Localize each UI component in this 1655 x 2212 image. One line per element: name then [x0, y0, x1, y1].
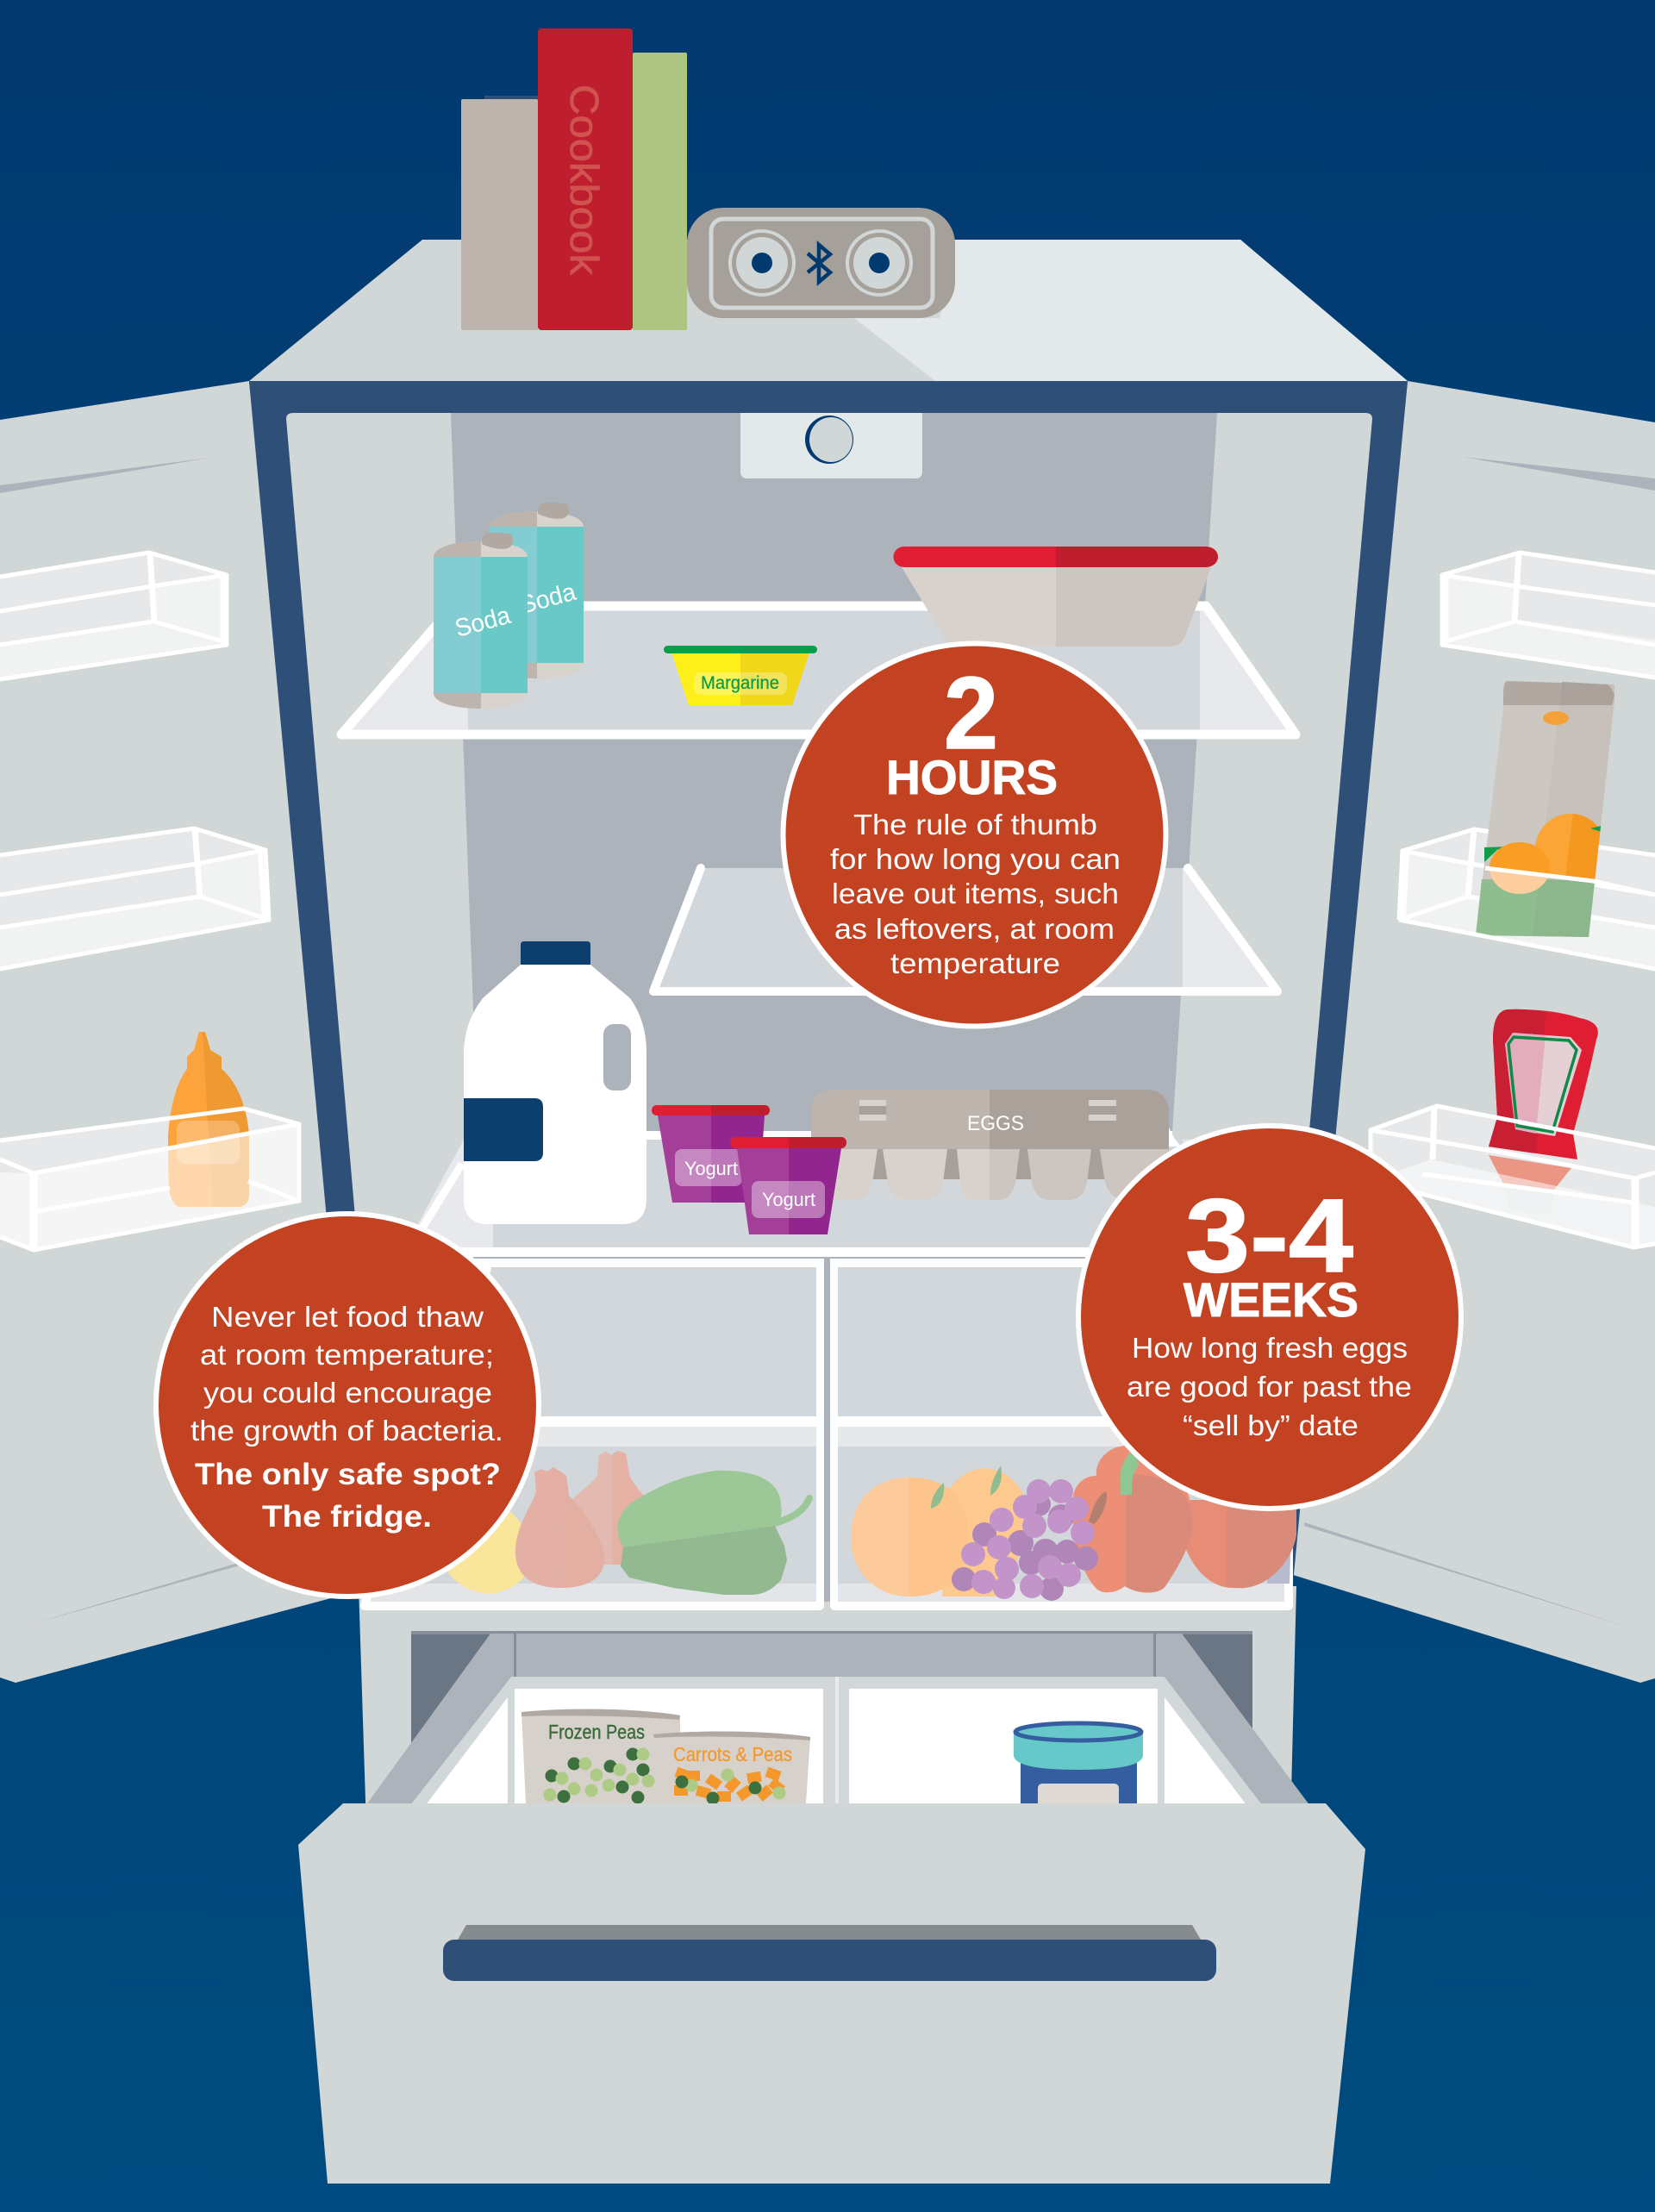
- front yogurt cup: [730, 1137, 846, 1234]
- freezer drawer front: [298, 1803, 1365, 2184]
- callout: never thaw at room temperature: at room temperature;: [200, 1339, 494, 1371]
- icon: ice cream tub: [1014, 1723, 1143, 1806]
- back yogurt cup: Yogurt: [684, 1158, 738, 1179]
- egg carton cups: [828, 1149, 1171, 1200]
- callout: 3-4 weeks: “sell by” date: [1183, 1409, 1358, 1441]
- icon: lemon: [436, 1510, 544, 1593]
- icon: yogurt cups: [652, 1105, 846, 1234]
- callout: never thaw at room temperature: The fridge.: [262, 1500, 432, 1534]
- icon: onion back: [569, 1451, 657, 1565]
- middle shelf: [653, 868, 1277, 991]
- callout: 3-4 weeks: How long fresh eggs: [1132, 1332, 1408, 1364]
- door shelf: left top: [0, 553, 227, 679]
- crisper drawers: [360, 1247, 1296, 1610]
- icon: bluetooth speaker: [687, 208, 955, 318]
- freezer bins: [409, 1677, 1263, 1806]
- icon: mustard bottle: [168, 1032, 249, 1207]
- back soda can: Soda: [517, 578, 579, 620]
- callout: 2 hours: temperature: [890, 947, 1060, 979]
- icon: soda cans: [434, 503, 584, 709]
- interior light: [740, 413, 922, 478]
- callout: 2 hours: The rule of thumb: [853, 809, 1097, 840]
- door shelf: right bottom back: [1371, 1106, 1655, 1247]
- icon: books: [461, 28, 687, 330]
- door shelf: left middle: [0, 828, 269, 969]
- left fridge door: [0, 381, 366, 1683]
- bottom shelf: [405, 1122, 1246, 1250]
- icon: milk jug: [464, 941, 646, 1224]
- icon: egg carton: EGGS: [967, 1112, 1024, 1135]
- icon: oranges: [851, 1465, 1027, 1597]
- icon: juice carton: [1476, 681, 1614, 937]
- callout: 3-4 weeks: are good for past the: [1127, 1371, 1412, 1403]
- door shelf: right middle back: [1399, 829, 1655, 969]
- front soda can: [434, 533, 528, 709]
- back wall: [451, 413, 1217, 1147]
- front soda can: Soda: [453, 602, 514, 643]
- callout: 2 hours: leave out items, such: [832, 878, 1119, 909]
- icon: carrots and peas bag: Carrots & Peas: [673, 1743, 792, 1765]
- drawer handle: [443, 1925, 1216, 1981]
- left crisper drawer: [360, 1259, 824, 1610]
- callout: never thaw at room temperature: The only safe spot?: [195, 1458, 501, 1491]
- egg carton lid: [811, 1090, 990, 1149]
- fridge lower body: [359, 1586, 1296, 1828]
- icon: red peppers: [1072, 1446, 1296, 1593]
- callout: 2 hours: 2: [944, 656, 998, 771]
- door shelf: right middle glass front: [1399, 881, 1655, 969]
- door shelf: left bottom with mustard: [0, 1032, 299, 1250]
- back soda can: [490, 503, 584, 678]
- icon: margarine tub: Margarine: [701, 673, 779, 693]
- icon: egg carton: [811, 1090, 1171, 1200]
- back yogurt cup: [652, 1105, 770, 1203]
- fridge top surface: [249, 240, 1408, 381]
- icon: green pepper: [617, 1471, 809, 1595]
- right fridge door: [1290, 381, 1655, 1683]
- icon: grapes: [952, 1479, 1098, 1601]
- icon: ketchup bottle: [1489, 1009, 1598, 1215]
- callout: never thaw at room temperature: you could encourage: [203, 1377, 492, 1409]
- door shelf: right bottom glass: [1371, 1106, 1655, 1247]
- book title: Cookbook: [562, 84, 607, 276]
- callout: 2 hours: HOURS: [886, 750, 1058, 804]
- callout: 3-4 weeks: WEEKS: [1183, 1272, 1358, 1327]
- callout: 3-4 weeks: [1078, 1126, 1461, 1509]
- callout: never thaw at room temperature: the growth of bacteria.: [190, 1415, 503, 1447]
- top shelf: [341, 606, 1296, 734]
- icon: onion front: [515, 1467, 604, 1588]
- callout: 2 hours: for how long you can: [830, 843, 1121, 875]
- icon: carrots and peas bag: [653, 1732, 810, 1805]
- fridge navy frame: [249, 381, 1408, 1610]
- callout: 3-4 weeks: 3-4: [1185, 1177, 1353, 1294]
- fridge interior: [286, 413, 1372, 1267]
- freezer opening: [365, 1631, 1310, 1806]
- callout: never thaw at room temperature: Never let food thaw: [211, 1301, 484, 1333]
- callout: never thaw at room temperature: [156, 1214, 539, 1597]
- callout: 2 hours: [783, 643, 1165, 1026]
- icon: frozen peas bag: [521, 1709, 680, 1803]
- icon: frozen peas bag: Frozen Peas: [548, 1721, 645, 1743]
- door shelf: right top: [1442, 553, 1655, 678]
- callout: 2 hours: as leftovers, at room: [834, 913, 1115, 945]
- right crisper drawer: [830, 1259, 1293, 1610]
- front yogurt cup: Yogurt: [762, 1189, 815, 1210]
- icon: margarine tub: [664, 646, 817, 705]
- icon: leftovers bowl: [893, 547, 1218, 647]
